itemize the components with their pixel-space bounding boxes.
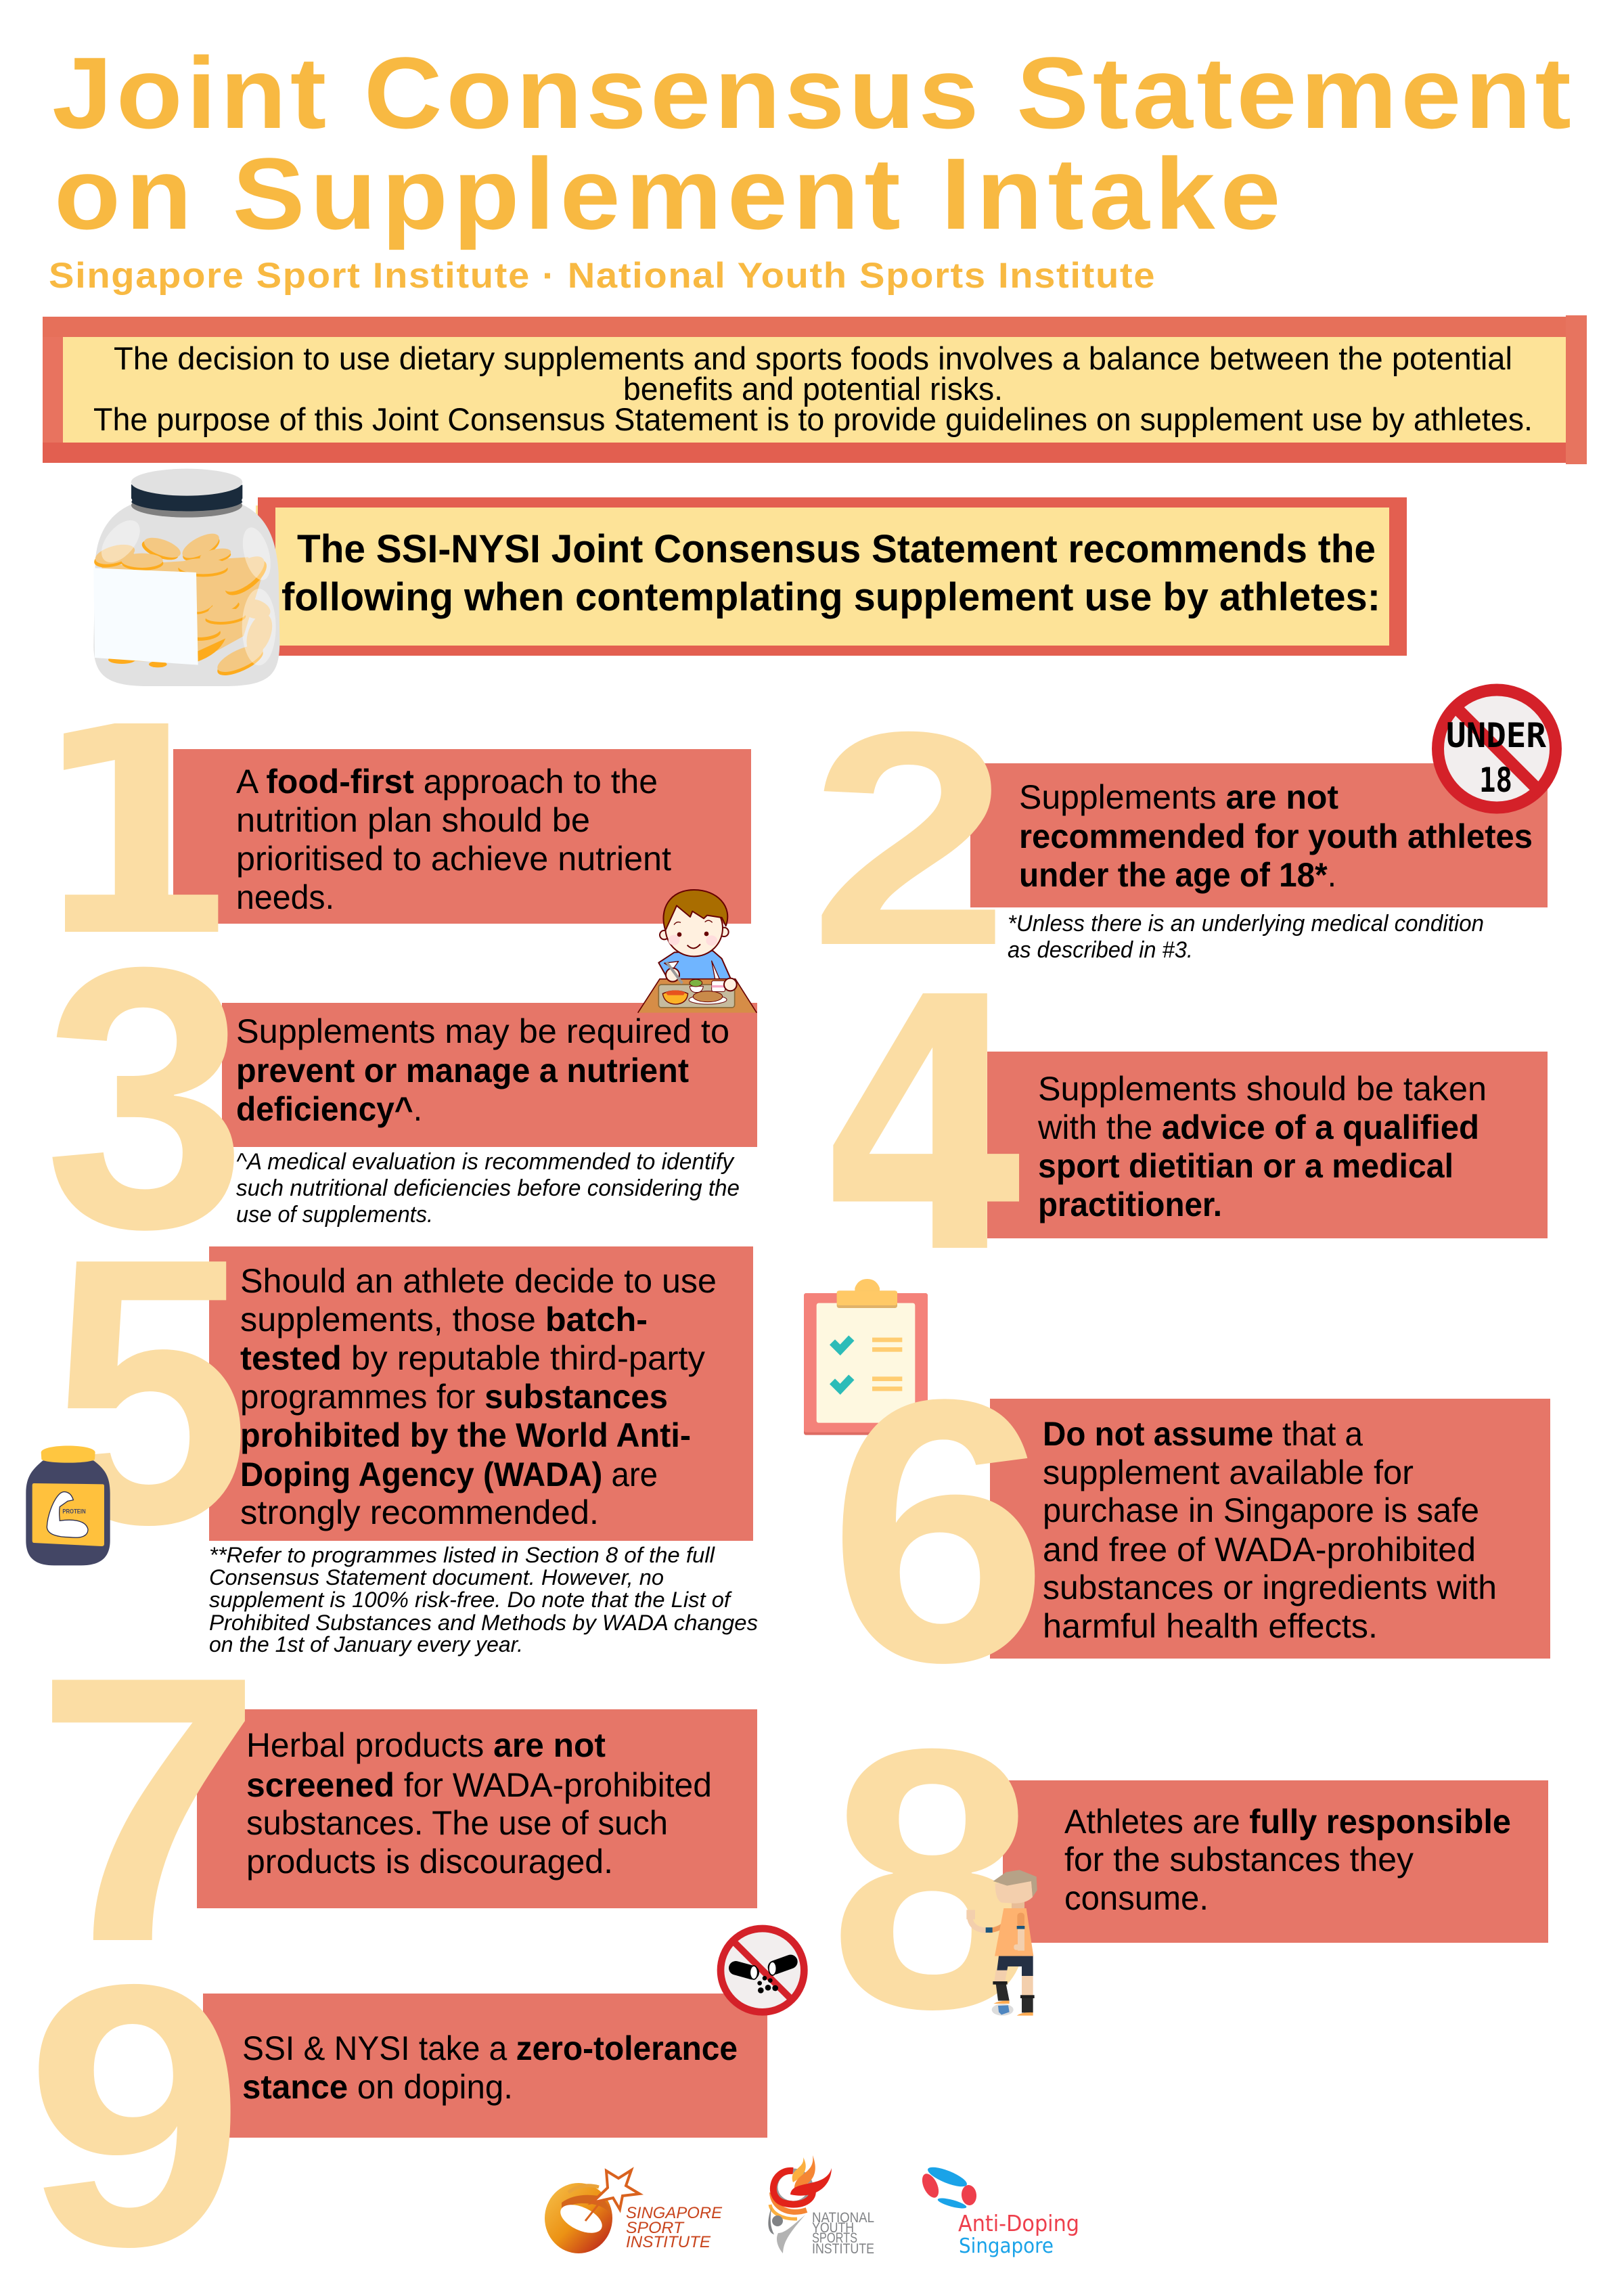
icon: boy eating a meal bbox=[638, 890, 757, 1013]
panel: recommendation 7 bbox=[35, 1598, 757, 2021]
panel: recommendation 3 bbox=[44, 891, 757, 1306]
text 8: consume. bbox=[1064, 1879, 1209, 1917]
number 7: 7 bbox=[35, 1598, 263, 2021]
panel: recommendation 4 bbox=[819, 924, 1548, 1330]
text 4: with the advice of a qualified bbox=[1037, 1108, 1479, 1146]
box 2 bbox=[970, 763, 1548, 907]
footnote 2 bbox=[1008, 911, 1484, 963]
panel: recommendation 1 bbox=[30, 667, 751, 999]
text 9 bbox=[242, 2029, 738, 2106]
text 5: Doping Agency (WADA) are bbox=[240, 1456, 658, 1493]
footnote 5: on the 1st of January every year. bbox=[209, 1632, 523, 1657]
logo: Anti-Doping Singapore: Singapore bbox=[959, 2234, 1054, 2258]
panel: introduction: The purpose of this Joint Consensus Statement is to provide guidelines on supplement use by athletes. bbox=[93, 401, 1533, 437]
box 3 bbox=[222, 1003, 757, 1147]
logo: Anti-Doping Singapore bbox=[919, 2163, 1079, 2258]
text 3: Supplements may be required to bbox=[236, 1012, 729, 1050]
icon: supplement jar bbox=[92, 469, 279, 686]
logo: Anti-Doping Singapore: Anti-Doping bbox=[958, 2210, 1079, 2236]
box 4 bbox=[987, 1052, 1548, 1238]
text 2: recommended for youth athletes bbox=[1019, 817, 1533, 855]
text 4: sport dietitian or a medical bbox=[1038, 1147, 1453, 1185]
text 1: needs. bbox=[236, 878, 334, 916]
number 5: 5 bbox=[49, 1179, 251, 1603]
number 3: 3 bbox=[44, 891, 247, 1306]
text 9: SSI & NYSI take a zero-tolerance bbox=[242, 2029, 738, 2067]
box 5 bbox=[209, 1246, 753, 1541]
text 7: screened for WADA-prohibited bbox=[246, 1766, 712, 1804]
number 4: 4 bbox=[819, 924, 1033, 1330]
panel: recommendation heading: The SSI-NYSI Joint Consensus Statement recommends the bbox=[297, 527, 1376, 571]
text 5 bbox=[240, 1262, 717, 1531]
text 9: stance on doping. bbox=[242, 2068, 513, 2106]
footnote 2: as described in #3. bbox=[1008, 937, 1193, 963]
logo: National Youth Sports Institute: INSTITUTE bbox=[812, 2241, 874, 2257]
text 7: Herbal products are not bbox=[246, 1726, 606, 1764]
panel: recommendation 8 bbox=[829, 1672, 1548, 2086]
text 3: prevent or manage a nutrient bbox=[236, 1052, 689, 1089]
text 6: Do not assume that a bbox=[1043, 1415, 1363, 1453]
number 8: 8 bbox=[829, 1672, 1036, 2086]
panel: introduction: The decision to use dietary supplements and sports foods involves a balance between the potential bbox=[114, 340, 1512, 376]
text 1: prioritised to achieve nutrient bbox=[236, 840, 671, 878]
logo: Singapore Sport Institute bbox=[545, 2170, 723, 2253]
number 1: 1 bbox=[30, 667, 239, 999]
text 4: practitioner. bbox=[1038, 1186, 1222, 1223]
text 6 bbox=[1043, 1415, 1497, 1645]
number 2: 2 bbox=[809, 669, 1010, 1009]
text 5: supplements, those batch- bbox=[240, 1301, 648, 1338]
text 5: tested by reputable third-party bbox=[240, 1339, 705, 1377]
panel: recommendation 2 bbox=[809, 669, 1548, 1009]
footnote 5: **Refer to programmes listed in Section 8 of the full bbox=[209, 1543, 715, 1567]
footnote 3: use of supplements. bbox=[236, 1202, 433, 1228]
text 7: substances. The use of such bbox=[246, 1804, 668, 1842]
text 8: for the substances they bbox=[1064, 1841, 1414, 1878]
text 6: harmful health effects. bbox=[1043, 1607, 1378, 1645]
text 7 bbox=[246, 1726, 712, 1881]
title bbox=[52, 36, 1571, 250]
box 8 bbox=[1003, 1780, 1548, 1943]
logo: Singapore Sport Institute: SINGAPORE bbox=[626, 2204, 723, 2222]
number 6: 6 bbox=[828, 1322, 1050, 1740]
icon: protein tub: PROTEIN bbox=[62, 1508, 86, 1515]
text 6: supplement available for bbox=[1043, 1454, 1414, 1491]
footnote 5: Prohibited Substances and Methods by WADA changes bbox=[209, 1611, 758, 1635]
panel: recommendation 5 bbox=[49, 1179, 758, 1657]
box 6 bbox=[990, 1399, 1550, 1659]
logo: Singapore Sport Institute: SPORT bbox=[626, 2219, 685, 2237]
footnote 5 bbox=[209, 1543, 758, 1657]
text 1: nutrition plan should be bbox=[236, 801, 590, 839]
icon: under 18 prohibition sign bbox=[1438, 690, 1556, 808]
text 4 bbox=[1037, 1070, 1487, 1223]
text 7: products is discouraged. bbox=[246, 1843, 613, 1881]
box 7 bbox=[197, 1709, 757, 1908]
panel: recommendation 6 bbox=[828, 1322, 1550, 1740]
title: on Supplement Intake bbox=[54, 137, 1281, 250]
text 3: deficiency^. bbox=[236, 1090, 422, 1128]
panel: recommendation 9 bbox=[25, 1908, 767, 2296]
box 9 bbox=[203, 1994, 767, 2138]
text 2: under the age of 18*. bbox=[1019, 856, 1336, 894]
footnote 3: ^A medical evaluation is recommended to identify bbox=[236, 1149, 735, 1175]
panel: introduction bbox=[43, 315, 1587, 464]
text 5: programmes for substances bbox=[240, 1378, 668, 1416]
icon: under 18 prohibition sign: UNDER bbox=[1446, 716, 1547, 755]
text 6: substances or ingredients with bbox=[1043, 1569, 1497, 1606]
panel: recommendation heading bbox=[256, 497, 1407, 656]
text 1 bbox=[236, 763, 671, 916]
panel: recommendation heading: following when contemplating supplement use by athletes: bbox=[281, 575, 1380, 619]
icon: clipboard checklist bbox=[804, 1279, 928, 1435]
box 1 bbox=[173, 749, 751, 924]
panel: introduction: benefits and potential risks. bbox=[623, 371, 1003, 407]
text 5: strongly recommended. bbox=[240, 1493, 599, 1531]
footnote 2: *Unless there is an underlying medical condition bbox=[1008, 911, 1484, 937]
text 6: and free of WADA-prohibited bbox=[1043, 1531, 1476, 1569]
icon: protein tub bbox=[26, 1445, 110, 1565]
text 2 bbox=[1019, 778, 1533, 894]
text 4: Supplements should be taken bbox=[1038, 1070, 1487, 1108]
footnote 5: supplement is 100% risk-free. Do note that the List of bbox=[209, 1588, 732, 1612]
icon: under 18 prohibition sign: 18 bbox=[1479, 761, 1512, 800]
logo: National Youth Sports Institute: YOUTH bbox=[812, 2220, 854, 2236]
footnote 5: Consensus Statement document. However, no bbox=[209, 1565, 664, 1590]
icon: athlete bbox=[966, 1870, 1037, 2016]
subtitle: Singapore Sport Institute · National Youth Sports Institute bbox=[49, 255, 1155, 296]
text 5: prohibited by the World Anti- bbox=[240, 1416, 691, 1454]
footnote 3 bbox=[236, 1149, 740, 1228]
text 8: Athletes are fully responsible bbox=[1064, 1803, 1511, 1841]
title: Joint Consensus Statement bbox=[52, 36, 1571, 150]
logo: National Youth Sports Institute: SPORTS bbox=[812, 2230, 857, 2246]
text 2: Supplements are not bbox=[1019, 778, 1338, 816]
footnote 3: such nutritional deficiencies before considering the bbox=[236, 1175, 740, 1201]
text 8 bbox=[1064, 1803, 1511, 1917]
text 1: A food-first approach to the bbox=[236, 763, 658, 801]
text 6: purchase in Singapore is safe bbox=[1043, 1491, 1479, 1529]
text 3 bbox=[236, 1012, 729, 1128]
icon: no capsules sign bbox=[721, 1929, 804, 2012]
logo: Singapore Sport Institute: INSTITUTE bbox=[626, 2233, 711, 2251]
logo: National Youth Sports Institute bbox=[768, 2155, 874, 2257]
text 5: Should an athlete decide to use bbox=[240, 1262, 717, 1300]
logo: National Youth Sports Institute: NATIONAL bbox=[812, 2210, 874, 2226]
